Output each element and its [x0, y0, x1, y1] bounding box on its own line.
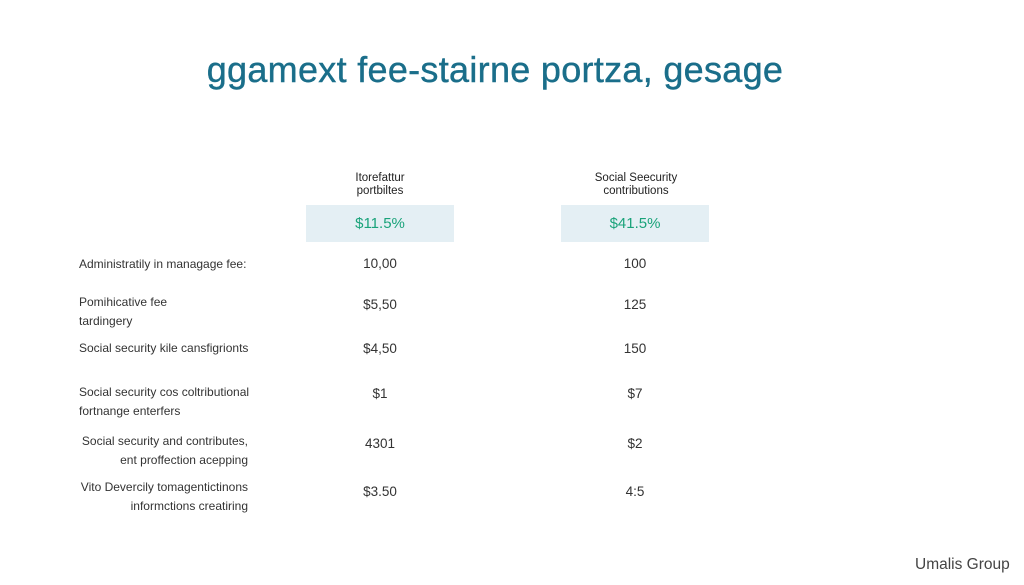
column 1 values: $1 — [372, 386, 388, 401]
column header: social security — [595, 172, 678, 197]
row labels: Pomihicative fee — [79, 295, 167, 309]
row labels: fortnange enterfers — [79, 404, 180, 418]
title: ggamext fee-stairne portza, gesage — [207, 49, 783, 90]
row labels — [79, 257, 249, 513]
column 2 values: 150 — [624, 341, 646, 356]
column header: social security: Social Seecurity — [595, 172, 677, 184]
value box 1 — [306, 205, 454, 242]
column 1 values: 10,00 — [363, 256, 397, 271]
column header: social security: contributions — [603, 185, 669, 197]
row labels: tardingery — [79, 314, 132, 328]
footer brand: Umalis Group — [915, 556, 1010, 573]
row labels: Social security kile cansfigrionts — [79, 341, 248, 355]
column header: portbiltes — [355, 172, 405, 197]
column 2 values: 100 — [624, 256, 646, 271]
column 2 values: $7 — [627, 386, 643, 401]
column 1 values: $5,50 — [363, 297, 397, 312]
column 2 values: 4:5 — [626, 484, 644, 499]
row labels: Administratily in managage fee: — [79, 257, 246, 271]
value box 2 — [561, 205, 709, 242]
column 2 values: 125 — [624, 297, 646, 312]
row labels: Social security cos coltributional — [79, 385, 249, 399]
row labels: Vito Devercily tomagentictinons — [81, 480, 248, 494]
column header: portbiltes: Itorefattur — [355, 172, 405, 184]
value box 2: $41.5% — [610, 215, 660, 232]
column 2 values: $2 — [627, 436, 643, 451]
column 1 values — [363, 256, 397, 499]
row labels: ent proffection acepping — [120, 453, 248, 467]
column 1 values: $4,50 — [363, 341, 397, 356]
column header: portbiltes: portbiltes — [357, 185, 403, 197]
value box 1: $11.5% — [355, 215, 405, 232]
column 1 values: $3.50 — [363, 484, 397, 499]
row labels: informctions creatiring — [131, 499, 248, 513]
row labels: Social security and contributes, — [82, 434, 248, 448]
column 2 values — [624, 256, 646, 499]
column 1 values: 4301 — [365, 436, 395, 451]
